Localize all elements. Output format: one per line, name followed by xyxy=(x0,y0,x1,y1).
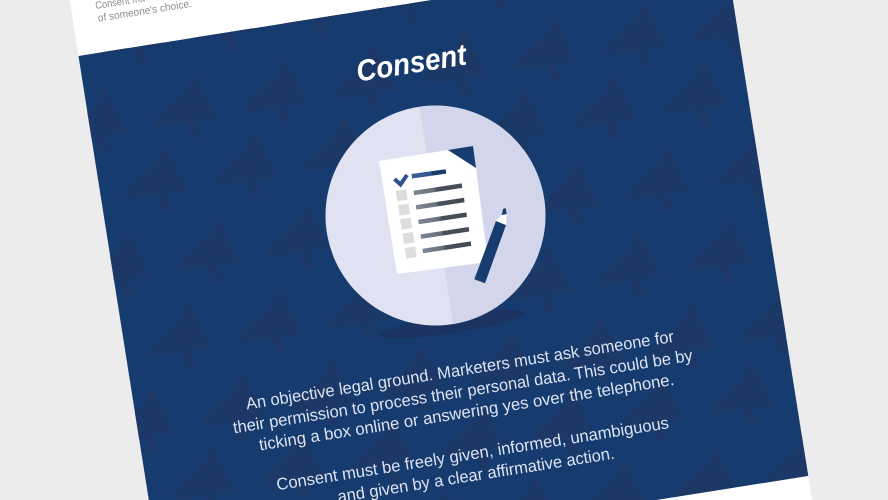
icon: pencil xyxy=(474,208,507,283)
icon: highlighted line xyxy=(412,169,446,178)
text block: description: ticking a box online or answering yes over the telephone. xyxy=(258,370,675,454)
text block: description xyxy=(228,324,708,500)
icon: text lines xyxy=(414,183,471,253)
icon shadow xyxy=(378,304,527,344)
text block: description: Consent must be freely given, informed, unambiguous xyxy=(275,413,670,494)
panel: top white section xyxy=(60,0,725,56)
text block: description: their permission to process their personal data. This could be by xyxy=(232,346,694,437)
panel: bottom white section xyxy=(161,476,827,500)
heading: Consent: Consent xyxy=(354,38,471,89)
icon: consent checklist illustration xyxy=(326,106,546,344)
text block: description: An objective legal ground. Marketers must ask someone for xyxy=(245,327,676,413)
icon: paper sheet xyxy=(379,150,488,274)
icon circle background xyxy=(326,106,546,326)
icon: check mark xyxy=(394,175,407,184)
icon: folded corner xyxy=(448,146,476,168)
icon: check boxes xyxy=(396,189,417,259)
